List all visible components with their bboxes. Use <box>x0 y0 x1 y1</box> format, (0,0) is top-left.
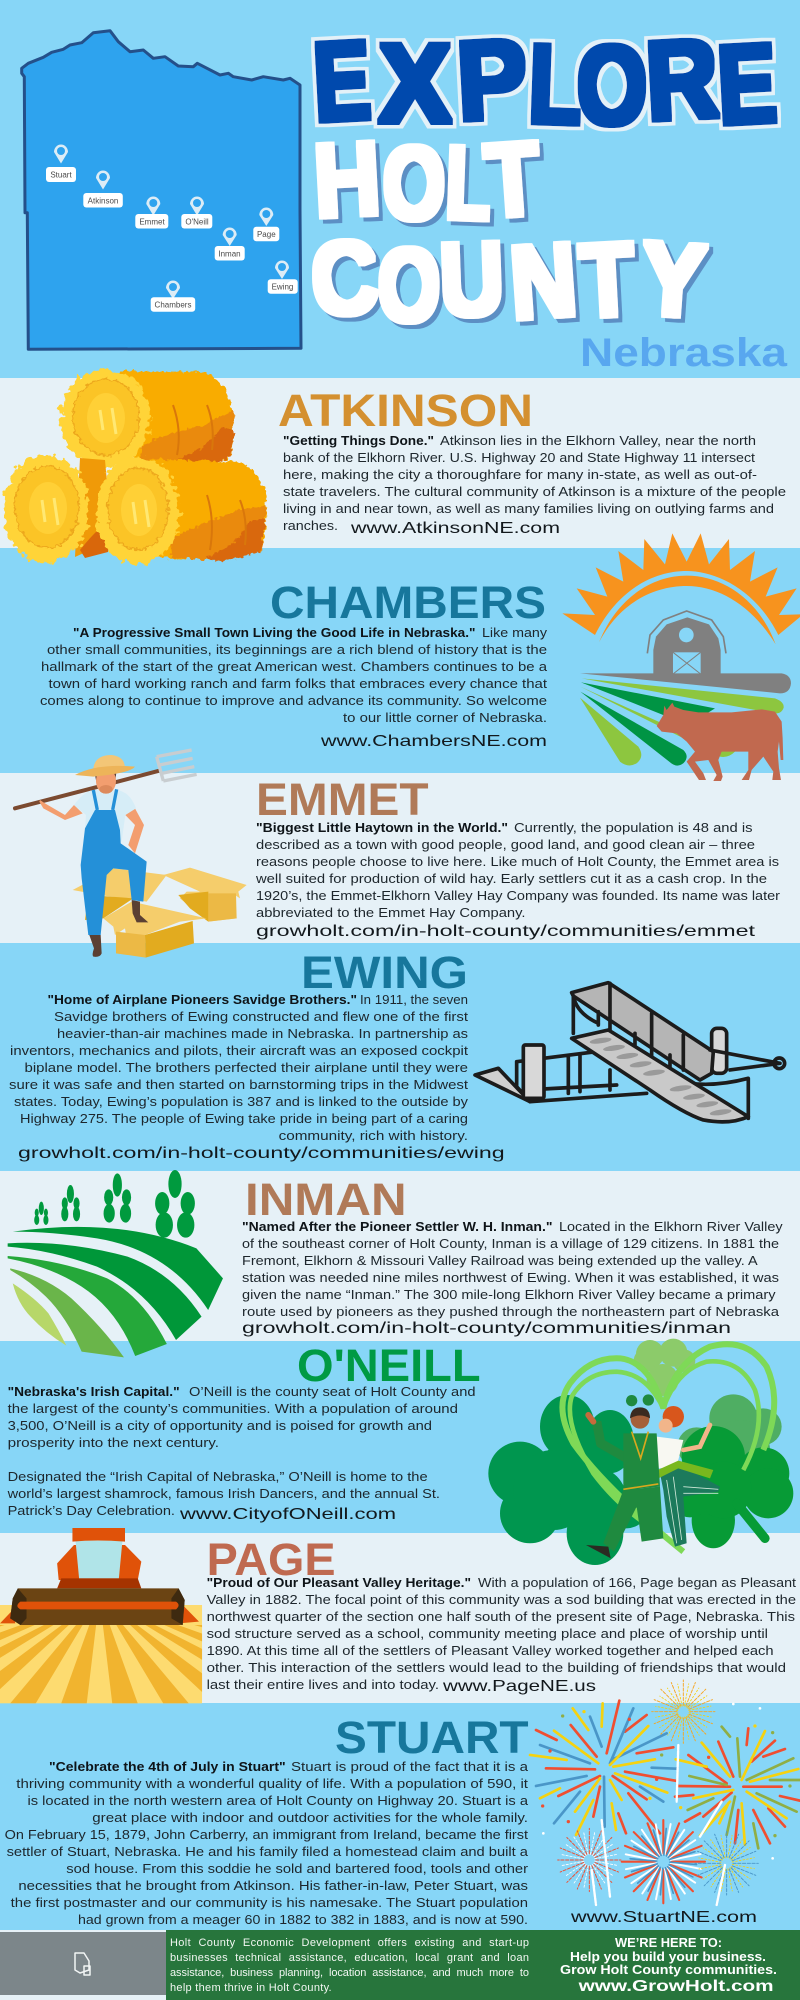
text block: Ewing: In 1911, the seven <box>360 993 468 1007</box>
text block: Stuart: is located in the north western area of Holt County on Highway 20. Stuart is a <box>28 1794 528 1808</box>
title: Explore: O <box>577 23 647 148</box>
text block: Inman: given the name “Inman.” The 300 mile-long Elkhorn River Valley became a primary <box>242 1288 776 1302</box>
text block: O'Neill: Patrick’s Day Celebration. <box>8 1504 175 1518</box>
title: County <box>308 219 709 344</box>
text block: Page: "Proud of Our Pleasant Valley Heritage." <box>207 1576 471 1590</box>
title: County: C <box>308 219 381 339</box>
band: Atkinson background <box>0 378 800 548</box>
title: Explore: R <box>643 15 721 144</box>
text block: O'Neill: O’Neill is the county seat of Holt County and <box>189 1385 476 1399</box>
title: Explore: E <box>715 20 779 148</box>
band: Inman background <box>0 1171 800 1341</box>
text block: Atkinson: here, making the city a thoroughfare for many in-state, as well as out-of- <box>283 468 757 482</box>
title: County: O <box>378 228 440 344</box>
map pin: Page: Page <box>257 230 276 239</box>
icon: fireworks <box>530 1678 800 1907</box>
title: Holt: H <box>311 121 383 240</box>
text block: Holt County Economic Development: businesses technical assistance, education, local grant and loan <box>170 1952 529 1964</box>
text block: Chambers: to our little corner of Nebraska. <box>343 711 547 725</box>
text block: Stuart: "Celebrate the 4th of July in Stuart" <box>49 1760 286 1774</box>
map pin: Ewing: Ewing <box>272 282 293 292</box>
text block: Holt County Economic Development: help them thrive in Holt County. <box>170 1982 332 1994</box>
text block: Chambers <box>40 626 548 725</box>
title: Explore: P <box>454 15 530 144</box>
band: footer background <box>0 1930 800 2000</box>
text block: O'Neill: the largest of the county’s communities. With a population of around <box>8 1402 458 1416</box>
heading: Emmet: EMMET <box>256 774 429 825</box>
map pin: O'Neill: O'Neill <box>185 218 209 226</box>
text block: Page: northwest quarter of the section one half south of the present site of Page, Nebraska. This <box>207 1610 795 1624</box>
text block: Ewing: heavier-than-air machines made in Nebraska. In partnership as <box>57 1027 468 1041</box>
callout: We're here to <box>560 1935 777 1995</box>
link: Inman website: growholt.com/in-holt-county/communities/inman <box>242 1320 731 1337</box>
band: Stuart background <box>0 1703 800 1930</box>
text block: Page: last their entire lives and into today. <box>207 1678 439 1692</box>
text block: Holt County Economic Development: assistance, business planning, location assistance, and much more to <box>170 1967 529 1979</box>
title: Holt: O <box>383 126 445 242</box>
text block: Stuart: great place with indoor and outdoor activities for the whole family. <box>92 1811 528 1825</box>
link: Ewing website: growholt.com/in-holt-county/communities/ewing <box>18 1145 505 1162</box>
text block: Holt County Economic Development: Holt County Economic Development offers existing and start-up <box>170 1937 529 1949</box>
title: Holt: T <box>482 120 543 240</box>
heading: Page: PAGE <box>207 1534 336 1585</box>
footer: gray block <box>0 1932 166 1995</box>
panel: Page <box>0 1528 800 1703</box>
text block: Page: sod structure served as a school, community meeting place and place of worship until <box>207 1627 768 1641</box>
band: Page background <box>0 1533 800 1703</box>
map pin: Chambers <box>151 280 195 312</box>
title: Explore <box>311 15 779 148</box>
icon: shamrocks, heart and Irish dancers <box>488 1339 793 1565</box>
title: Explore: X <box>379 21 451 146</box>
text block: Emmet: Currently, the population is 48 and is <box>514 821 752 835</box>
text block: Emmet: 1920’s, the Emmet-Elkhorn Valley Hay Company was founded. Its name was later <box>256 889 780 903</box>
text block: Stuart: settler of Stuart, Nebraska. He and his family filed a homestead claim and built a <box>7 1845 528 1859</box>
text block: Ewing: inventors, mechanics and pilots, their aircraft was an exposed cockpit <box>10 1044 469 1058</box>
text block: Inman: of the southeast corner of Holt County, Inman is a village of 129 citizens. In 1881 the <box>242 1237 779 1251</box>
link: Emmet website: growholt.com/in-holt-county/communities/emmet <box>256 923 756 940</box>
link: Stuart website: www.StuartNE.com <box>570 1909 757 1926</box>
text block: Ewing: community, rich with history. <box>279 1129 468 1143</box>
text block: Emmet: "Biggest Little Haytown in the World." <box>256 821 508 835</box>
panel: Emmet <box>15 750 780 958</box>
map pin: Emmet: Emmet <box>139 218 165 226</box>
text block: Chambers: other small communities, its beginnings are a rich blend of history that is the <box>47 643 547 657</box>
text block: Emmet: well suited for production of wild hay. Early settlers cut it as a cash crop. In the <box>255 872 767 886</box>
text block: Chambers: hallmark of the start of the great American west. Chambers continues to be a <box>41 660 547 674</box>
map pin: Page <box>253 208 279 241</box>
text block: Atkinson: bank of the Elkhorn River. U.S. Highway 20 and State Highway 11 intersect <box>283 451 756 465</box>
band: Ewing background <box>0 943 800 1171</box>
text block: Emmet <box>255 821 780 920</box>
text block: Atkinson: state travelers. The cultural community of Atkinson is a mixture of the people <box>283 485 786 499</box>
heading: Chambers: CHAMBERS <box>270 577 546 628</box>
callout: We're here to: Grow Holt County communities. <box>560 1962 777 1977</box>
icon: hay bales <box>3 369 266 565</box>
text block: Ewing: Highway 275. The people of Ewing take pride in being part of a caring <box>20 1112 468 1126</box>
text block: Atkinson <box>283 434 786 533</box>
text block: Stuart: had grown from a meager 60 in 1882 to 382 in 1883, and is now at 590. <box>78 1913 528 1927</box>
text block: Atkinson: ranches. <box>283 519 338 533</box>
text block: Stuart: necessities that he brought from Atkinson. His father-in-law, Peter Stuart, was <box>18 1879 528 1893</box>
text block: Stuart: the first postmaster and our community is his namesake. The Stuart population <box>11 1896 528 1910</box>
panel: Chambers <box>40 533 800 781</box>
link: Chambers website: www.ChambersNE.com <box>320 733 547 750</box>
icon: biplane <box>475 983 785 1122</box>
text block: Chambers: town of hard working ranch and farm folks that embraces every chance that <box>48 677 548 691</box>
text block: Inman: Fremont, Elkhorn & Missouri Valley Railroad was being extended up the valley. A <box>242 1254 758 1268</box>
text block: Emmet: abbreviated to the Emmet Hay Company. <box>256 906 526 920</box>
heading: Atkinson: ATKINSON <box>278 385 533 436</box>
panel: O'Neill <box>6 1339 793 1565</box>
panel: Inman <box>8 1170 783 1357</box>
text block: Ewing: sure it was safe and then started on barnstorming trips in the Midwest <box>9 1078 469 1092</box>
callout: We're here to: www.GrowHolt.com <box>577 1978 774 1995</box>
text block: Holt County Economic Development <box>170 1937 529 1994</box>
band: Emmet background <box>0 773 800 943</box>
subtitle: Nebraska: Nebraska <box>580 331 788 375</box>
panel: Ewing <box>9 947 785 1162</box>
text block: Emmet: reasons people choose to live here. Like much of Holt County, the Emmet area is <box>256 855 779 869</box>
icon: farmer with pitchfork on hay <box>15 750 247 958</box>
icon: wheat and farm field logo <box>8 1170 223 1357</box>
text block: Inman: station was needed nine miles northwest of Ewing. When it was established, it was <box>242 1271 779 1285</box>
title: Holt: L <box>444 125 492 243</box>
link: Page website: www.PageNE.us <box>442 1678 596 1695</box>
text block: Ewing: states. Today, Ewing’s population is 387 and is linked to the outside by <box>14 1095 469 1109</box>
heading: Ewing: EWING <box>301 947 468 998</box>
text block: O'Neill: prosperity into the next century. <box>8 1436 219 1450</box>
text block: Atkinson: Atkinson lies in the Elkhorn Valley, near the north <box>440 434 756 448</box>
heading: Stuart: STUART <box>335 1712 529 1763</box>
callout: We're here to: Help you build your business. <box>570 1949 766 1964</box>
text block: Page: 1890. At this time all of the settlers of Pleasant Valley worked together and helped each <box>207 1644 774 1658</box>
callout: We're here to: WE’RE HERE TO: <box>615 1935 722 1950</box>
text block: O'Neill: "Nebraska's Irish Capital." <box>8 1385 180 1399</box>
text block: Page: With a population of 166, Page began as Pleasant <box>478 1576 797 1590</box>
text block: Stuart <box>5 1760 529 1927</box>
link: Atkinson website: www.AtkinsonNE.com <box>350 520 560 537</box>
map pin: O'Neill <box>181 196 212 228</box>
band: O'Neill background <box>0 1341 800 1533</box>
text block: Page: Valley in 1882. The focal point of this community was a sod building that was erected in the <box>207 1593 796 1607</box>
title: County: T <box>577 221 637 340</box>
title: County: N <box>507 222 580 342</box>
text block: Page: other. This interaction of the settlers would lead to the building of friendships that would <box>207 1661 786 1675</box>
text block: Chambers: "A Progressive Small Town Living the Good Life in Nebraska." <box>73 626 476 640</box>
text block: Chambers: comes along to continue to improve and advance its community. So welcome <box>40 694 547 708</box>
icon: combine harvester in field <box>0 1528 202 1704</box>
heading: Inman: INMAN <box>245 1174 407 1225</box>
map pin: Atkinson: Atkinson <box>88 196 118 206</box>
text block: Stuart: On February 15, 1879, John Carberry, an immigrant from Ireland, became the first <box>5 1828 529 1842</box>
link: O'Neill website: www.CityofONeill.com <box>179 1506 396 1523</box>
title: Explore: L <box>527 21 583 148</box>
text block: Inman: route used by pioneers as they pushed through the northeastern part of Nebraska <box>242 1305 779 1319</box>
text block: Stuart: thriving community with a wonderful quality of life. With a population of 590, it <box>16 1777 529 1791</box>
text block: Inman: Located in the Elkhorn River Valley <box>559 1220 783 1234</box>
title: County: Y <box>637 220 709 340</box>
icon: sun, barn, fields and cow <box>562 533 800 781</box>
heading: O'Neill: O'NEILL <box>297 1340 481 1391</box>
map pin: Atkinson <box>83 171 123 208</box>
text block: O'Neill <box>6 1385 476 1518</box>
text block: O'Neill: world’s largest shamrock, famous Irish Dancers, and the annual St. <box>6 1487 440 1501</box>
text block: Atkinson: living in and near town, as well as many families living on outlying farms and <box>283 502 774 516</box>
title: Holt <box>311 120 543 243</box>
text block: Page <box>207 1576 797 1692</box>
text block: Ewing <box>9 993 469 1143</box>
icon: document <box>75 1953 90 1975</box>
title: Explore: E <box>311 17 373 145</box>
text block: Inman <box>242 1220 783 1319</box>
text block: Inman: "Named After the Pioneer Settler W. H. Inman." <box>242 1220 553 1234</box>
map pin: Stuart <box>46 145 76 182</box>
text block: Ewing: "Home of Airplane Pioneers Savidge Brothers." <box>48 993 357 1007</box>
text block: O'Neill: Designated the “Irish Capital of Nebraska,” O’Neill is home to the <box>8 1470 428 1484</box>
text block: Atkinson: "Getting Things Done." <box>283 434 434 448</box>
text block: O'Neill: 3,500, O’Neill is a city of opportunity and is poised for growth and <box>8 1419 432 1433</box>
map pin: Stuart: Stuart <box>50 170 72 180</box>
map pin: Chambers: Chambers <box>155 300 191 310</box>
text block: Stuart: Stuart is proud of the fact that it is a <box>291 1760 528 1774</box>
map pin: Inman: Inman <box>218 250 241 258</box>
text block: Ewing: Savidge brothers of Ewing constructed and flew one of the first <box>54 1010 469 1024</box>
panel: footer <box>0 1930 800 2000</box>
map pin: Ewing <box>268 260 298 294</box>
map of Holt County <box>22 31 301 349</box>
text block: Ewing: biplane model. The brothers perfected their airplane until they were <box>24 1061 468 1075</box>
band: Chambers background <box>0 548 800 773</box>
map pin: Inman <box>215 227 245 260</box>
text block: Stuart: sod house. From this soddie he sold and bartered food, tools and other <box>66 1862 528 1876</box>
panel: Stuart <box>5 1678 800 1927</box>
map pin: Emmet <box>135 196 168 228</box>
panel: Atkinson <box>3 369 786 565</box>
band: header background <box>0 0 800 378</box>
text block: Chambers: Like many <box>482 626 548 640</box>
footer: green block <box>166 1930 800 2000</box>
text block: Emmet: described as a town with good people, good land, and good clean air – three <box>256 838 755 852</box>
title: County: U <box>438 221 506 339</box>
